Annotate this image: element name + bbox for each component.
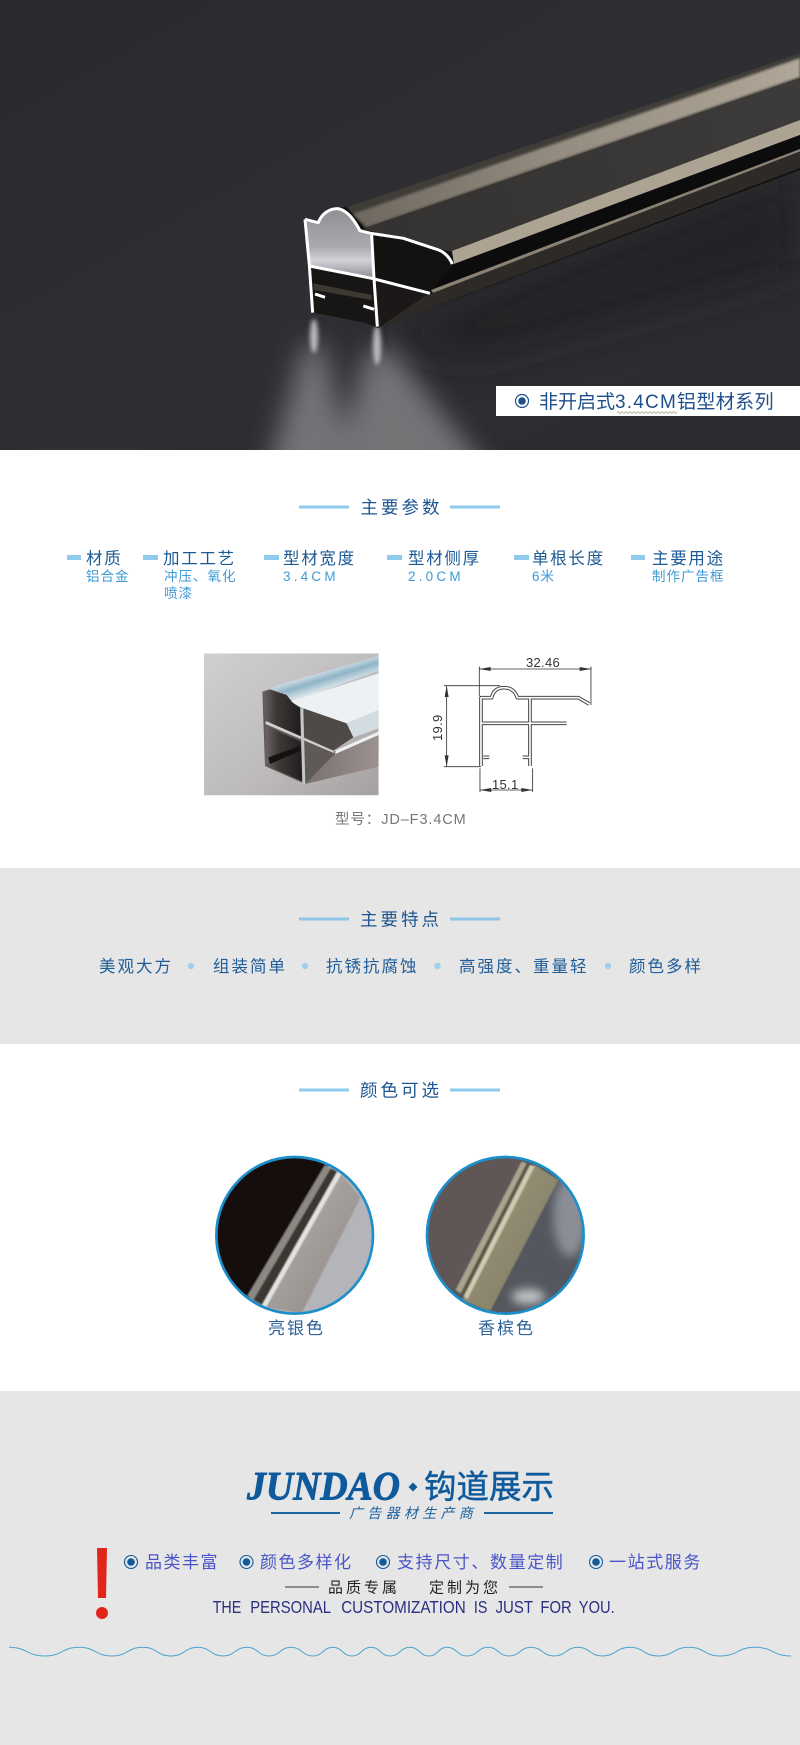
service bullets: 支持尺寸、数量定制	[397, 1553, 564, 1572]
aluminium profile cross-section	[305, 209, 452, 327]
label: bright silver: 亮银色	[268, 1319, 325, 1338]
swatch: champagne	[423, 1153, 590, 1338]
parameter: width: 型材宽度	[283, 549, 356, 568]
parameter: length	[514, 549, 605, 584]
service bullets: 品类丰富	[145, 1553, 219, 1572]
feature list: 美观大方	[99, 957, 173, 976]
parameter: length: 单根长度	[532, 549, 605, 568]
heading: main parameters	[299, 498, 500, 518]
decorative wave line	[9, 1647, 791, 1656]
slogan: Chinese	[285, 1580, 543, 1596]
technical drawing with dimensions	[444, 667, 591, 792]
heading: colours available	[299, 1080, 500, 1100]
icon: exclamation mark	[96, 1548, 108, 1619]
heading: main features: 主要特点	[360, 910, 442, 930]
parameter: material	[67, 549, 130, 584]
slogan: English: THE	[213, 1597, 241, 1617]
badge title: 非开启式3.4CM铝型材系列	[539, 391, 774, 413]
swatch: bright silver	[213, 1153, 380, 1338]
photo: silver profile sample	[204, 653, 379, 795]
service bullets: 颜色多样化	[260, 1553, 352, 1572]
feature list	[99, 957, 703, 976]
parameter: side thickness	[387, 549, 481, 584]
parameter: process: 喷漆	[164, 586, 193, 601]
parameter: width	[264, 549, 356, 584]
feature list: 颜色多样	[629, 957, 703, 976]
brand logo: 钩道展示	[424, 1469, 554, 1505]
feature list: 高强度、重量轻	[459, 957, 588, 976]
slogan: Chinese: 定制为您	[429, 1580, 501, 1596]
parameter: process	[143, 549, 236, 601]
label: champagne: 香槟色	[478, 1319, 535, 1338]
panel: brand footer	[0, 1391, 800, 1745]
slogan: English: JUST	[496, 1597, 533, 1617]
parameter: side thickness: 2.0CM	[408, 569, 464, 584]
panel: main features	[0, 868, 800, 1044]
dimension label 19.9: 19.9	[430, 714, 445, 741]
brand tagline: 广告器材生产商	[349, 1505, 477, 1521]
slogan: English: IS	[474, 1597, 487, 1617]
parameter: use: 制作广告框	[652, 569, 724, 584]
icon: bullet target	[516, 394, 528, 408]
parameter: use: 主要用途	[652, 549, 725, 568]
slogan: English: CUSTOMIZATION	[341, 1597, 466, 1617]
feature list: 组装简单	[213, 957, 287, 976]
slogan: English	[213, 1597, 615, 1617]
parameter: process: 冲压、氧化	[164, 569, 236, 584]
slogan: Chinese: 品质专属	[328, 1580, 400, 1596]
parameter: width: 3.4CM	[283, 569, 339, 584]
dimension label 32.46: 32.46	[526, 655, 560, 670]
dimension label 15.1: 15.1	[492, 777, 519, 792]
parameter: process: 加工工艺	[163, 549, 236, 568]
parameter: side thickness: 型材侧厚	[408, 549, 481, 568]
service bullets	[124, 1553, 702, 1572]
parameter: length: 6米	[532, 569, 555, 584]
panel: hero photo	[0, 0, 800, 480]
parameter: material: 材质	[86, 549, 122, 568]
slogan: English: PERSONAL	[250, 1597, 331, 1617]
heading: colours available: 颜色可选	[360, 1080, 442, 1100]
service bullets: 一站式服务	[609, 1553, 702, 1572]
brand logo	[246, 1464, 554, 1508]
slogan: English: FOR	[540, 1597, 572, 1617]
model caption: 型号：JD–F3.4CM	[335, 811, 467, 828]
slogan: English: YOU.	[579, 1597, 615, 1617]
feature list: 抗锈抗腐蚀	[326, 957, 418, 976]
aluminium rail body	[310, 53, 800, 328]
parameter: use	[631, 549, 725, 584]
badge: series name	[496, 386, 800, 416]
brand logo: JUNDAO	[246, 1464, 400, 1508]
heading: main parameters: 主要参数	[360, 498, 442, 518]
heading: main features	[299, 910, 500, 930]
parameter: material: 铝合金	[86, 569, 130, 584]
